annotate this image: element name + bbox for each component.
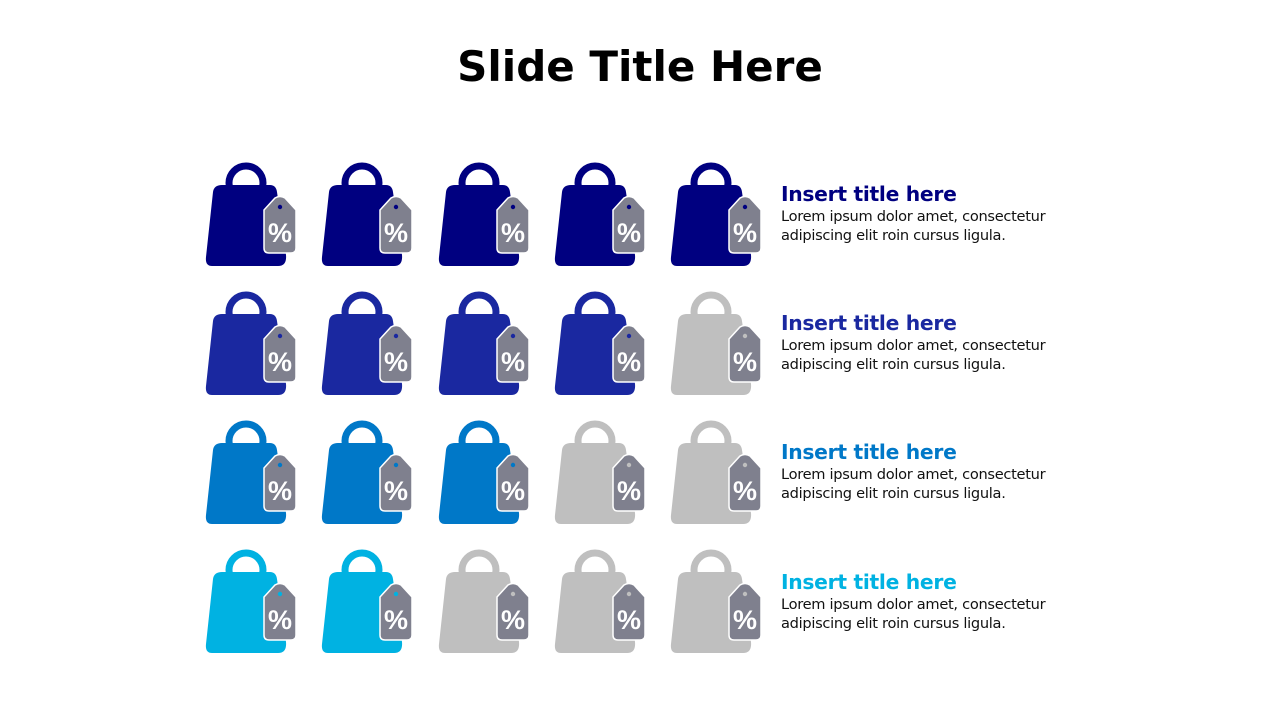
text block 1: [781, 182, 1046, 244]
row 4 bags: [206, 553, 761, 653]
text block 1: Lorem ipsum dolor amet, consectetur: [781, 208, 1045, 225]
text block 3: adipiscing elit roin cursus ligula.: [781, 485, 1006, 502]
row 2 bags: [206, 295, 761, 395]
row 1 bags: [206, 166, 761, 266]
text block 4: Lorem ipsum dolor amet, consectetur: [781, 596, 1045, 613]
text block 2: [781, 311, 1046, 373]
text block 3: [781, 440, 1046, 502]
text block 3: Lorem ipsum dolor amet, consectetur: [781, 466, 1045, 483]
text block 4: [781, 570, 1046, 632]
text block 2: Lorem ipsum dolor amet, consectetur: [781, 337, 1045, 354]
text block 3: Insert title here: [781, 440, 957, 464]
title: Slide Title Here: [457, 42, 823, 91]
text block 4: Insert title here: [781, 570, 957, 594]
text block 4: adipiscing elit roin cursus ligula.: [781, 615, 1006, 632]
text block 2: adipiscing elit roin cursus ligula.: [781, 356, 1006, 373]
text block 1: adipiscing elit roin cursus ligula.: [781, 227, 1006, 244]
text block 1: Insert title here: [781, 182, 957, 206]
text block 2: Insert title here: [781, 311, 957, 335]
row 3 bags: [206, 424, 761, 524]
